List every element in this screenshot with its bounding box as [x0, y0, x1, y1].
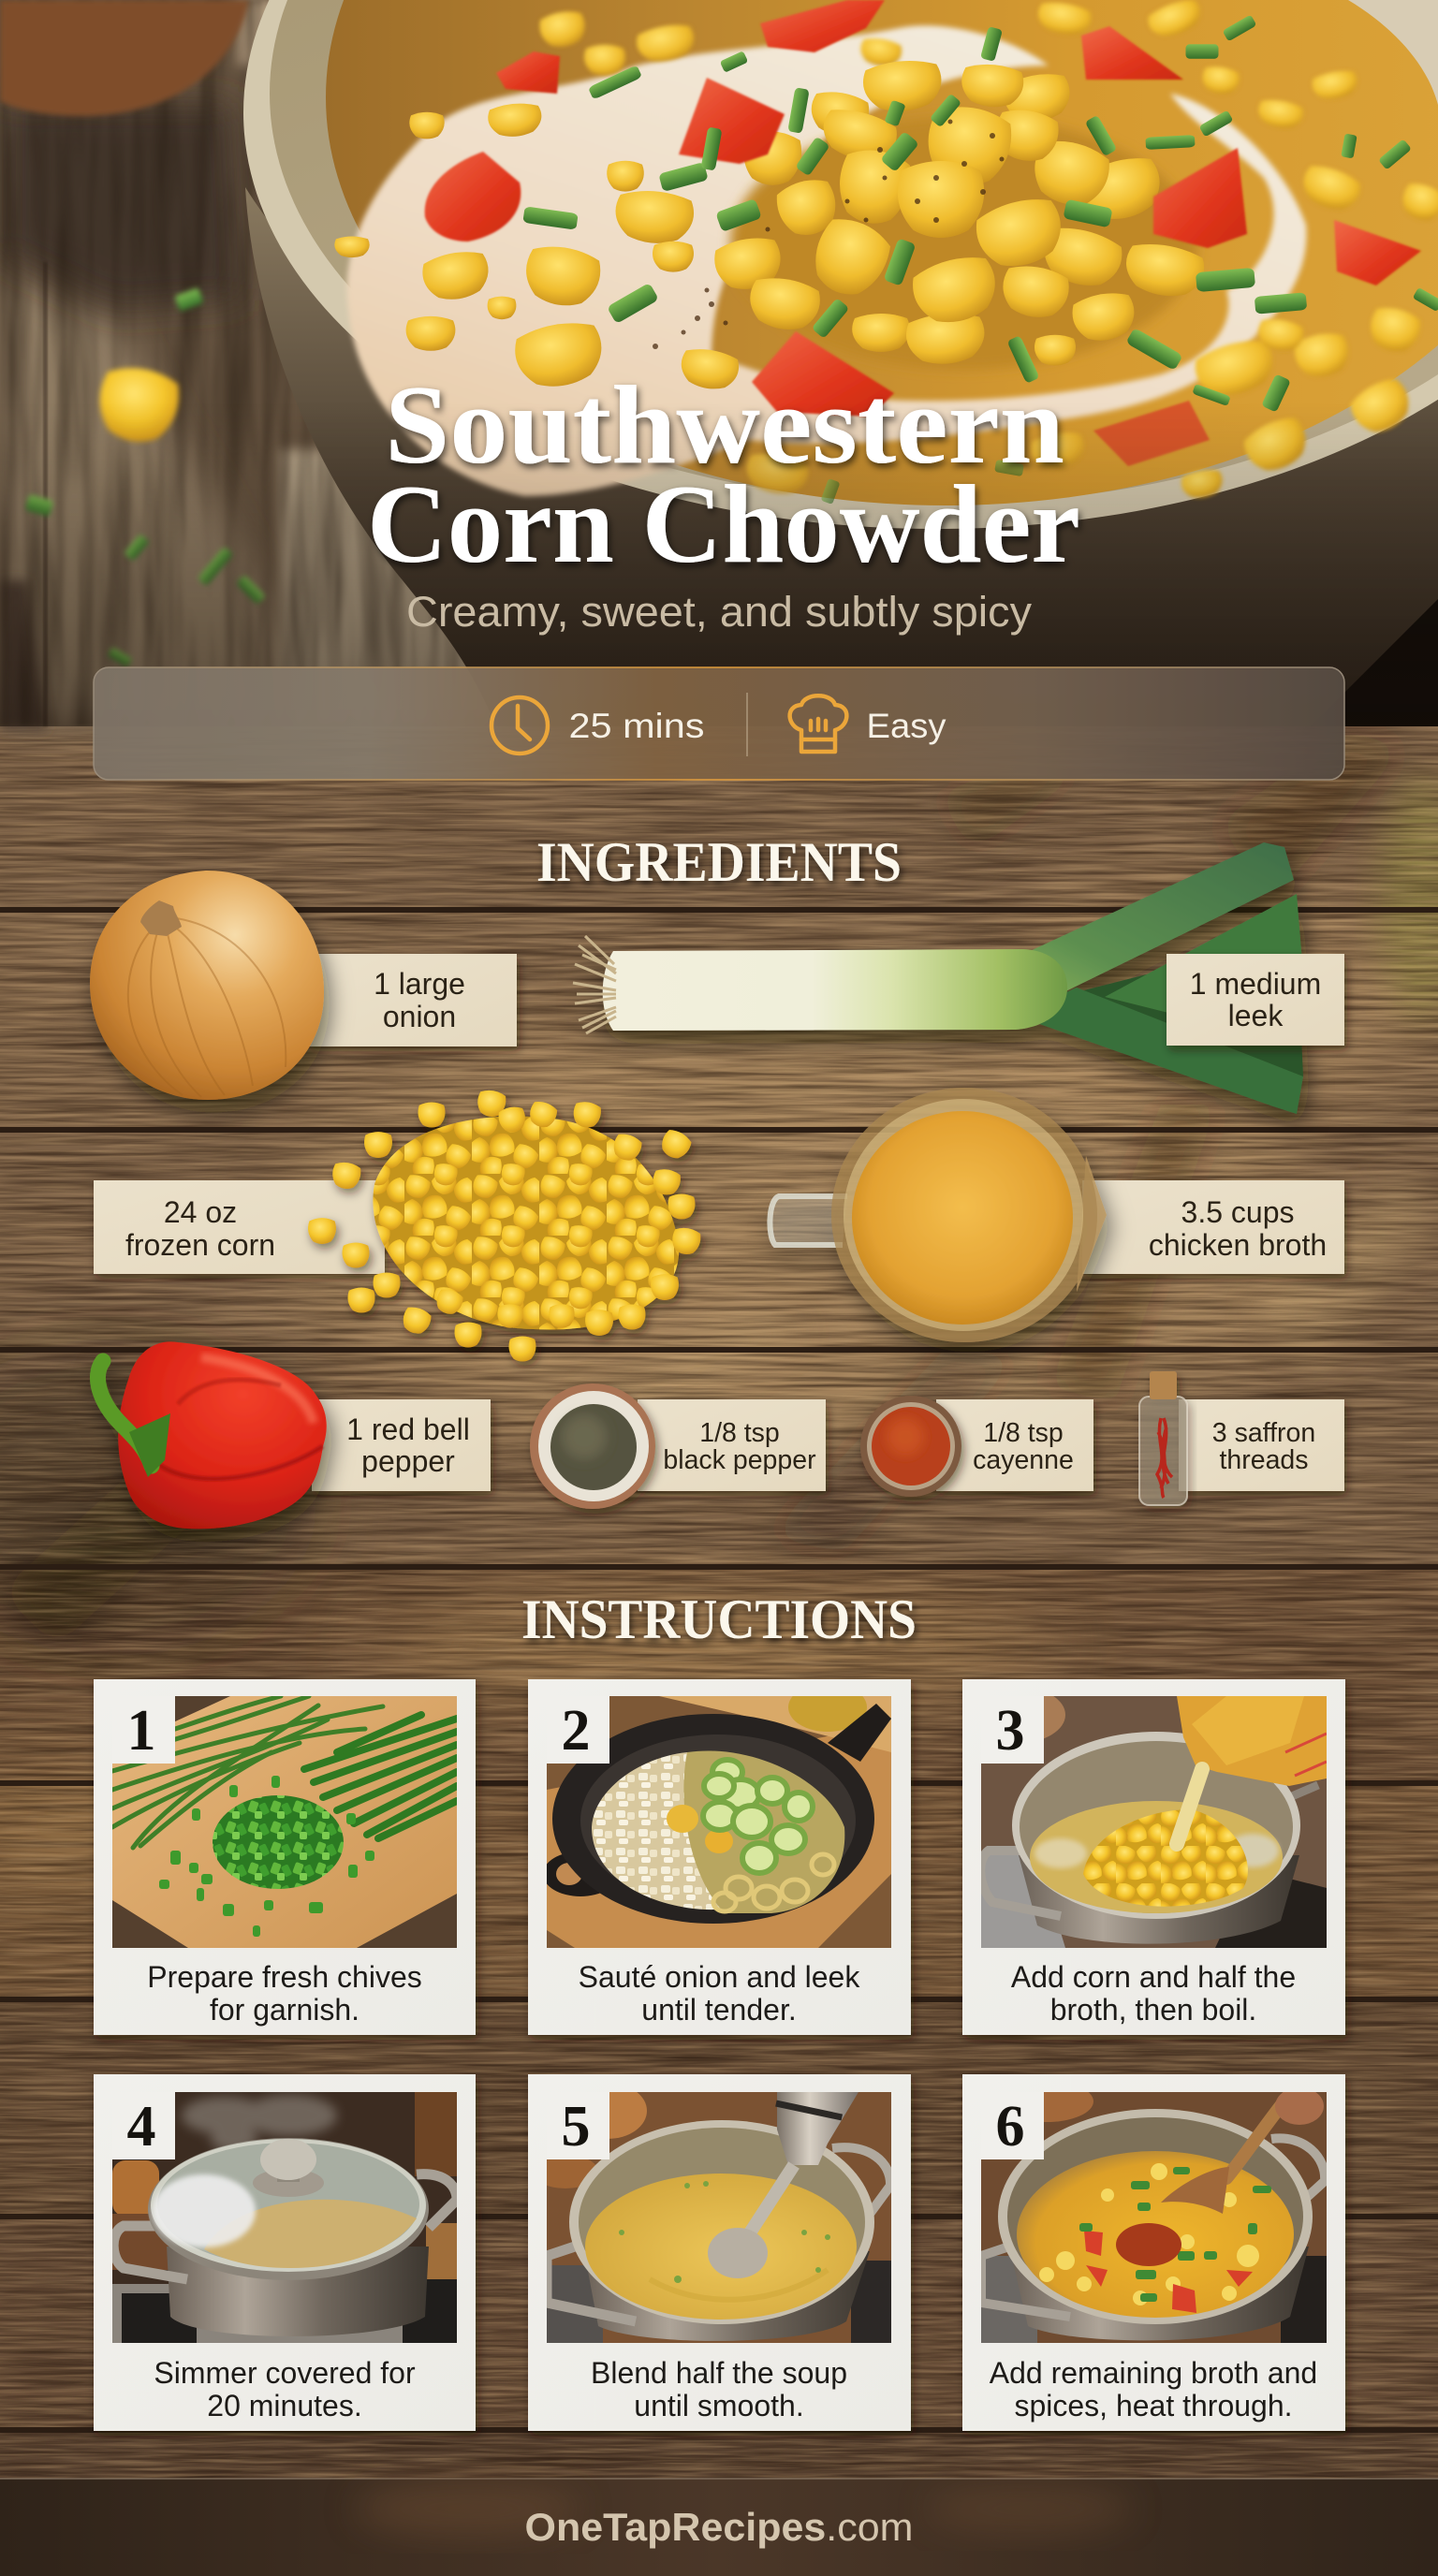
step card 2 [528, 1679, 911, 2035]
heading: instructions: INSTRUCTIONS [521, 1588, 917, 1650]
prep time: 25 mins [569, 707, 704, 745]
label: cayenne: cayenne [973, 1445, 1074, 1475]
pepper flecks on corn [653, 120, 1004, 349]
number badge 4: 4 [127, 2095, 155, 2159]
step 3 image: pouring broth on corn [981, 1696, 1327, 1948]
step card 5 [528, 2074, 911, 2431]
step 1 image: chives on cutting board [112, 1696, 457, 1948]
step 5 image: immersion blender in pot [547, 2092, 891, 2343]
step card 3 [962, 1679, 1345, 2035]
step 1 text: Prepare fresh chives [147, 1960, 422, 1994]
number badge 6 [981, 2092, 1044, 2159]
label: black pepper: 1/8 tsp [699, 1418, 780, 1448]
number badge 5: 5 [562, 2095, 590, 2159]
step card 1 [94, 1679, 476, 2035]
number badge 2: 2 [562, 1699, 590, 1763]
diced red peppers [425, 0, 1421, 466]
label: corn: frozen corn [125, 1228, 275, 1262]
footer [0, 2478, 1438, 2576]
wooden dish top left [0, 0, 249, 116]
panel: ingredients [90, 831, 1344, 1529]
step 2 text [579, 1960, 860, 2027]
step 6 text: Add remaining broth and [990, 2356, 1317, 2390]
icon: leek [573, 842, 1303, 1114]
number badge 1 [112, 1696, 175, 1764]
step 4 text: 20 minutes. [207, 2389, 362, 2422]
step card 6 [962, 2074, 1345, 2431]
step 4 text: Simmer covered for [154, 2356, 416, 2390]
hero: bowl of chowder on wood [0, 0, 1438, 730]
label: leek [1167, 954, 1344, 1046]
number badge 6: 6 [996, 2095, 1024, 2159]
chive pieces [522, 15, 1438, 505]
step 5 text: Blend half the soup [591, 2356, 847, 2390]
step 3 text: Add corn and half the [1011, 1960, 1296, 1994]
label: saffron: threads [1219, 1445, 1309, 1475]
label: onion: onion [383, 1000, 456, 1033]
subtitle: Creamy, sweet, and subtly spicy [406, 588, 1033, 636]
icon: chef hat [790, 695, 846, 752]
step 1 text [147, 1960, 422, 2027]
footer brand text: OneTapRecipes.com [524, 2505, 914, 2549]
step 1 text: for garnish. [210, 1993, 360, 2027]
icon: clock [492, 697, 548, 754]
label: saffron: 3 saffron [1212, 1418, 1315, 1448]
step 6 text [990, 2356, 1317, 2422]
label: broth: chicken broth [1149, 1228, 1327, 1262]
step 3 text: broth, then boil. [1050, 1993, 1256, 2027]
step 5 text: until smooth. [634, 2389, 804, 2422]
icon: bowl of cayenne [860, 1396, 961, 1497]
step 2 image: skillet with onion and leek [547, 1696, 891, 1948]
label: corn: 24 oz [164, 1195, 237, 1229]
icon: corn pile [308, 1089, 702, 1362]
label: onion: 1 large [374, 967, 465, 1001]
label: red bell pepper: pepper [361, 1444, 455, 1478]
soup corn kernels [334, 0, 1438, 501]
label: broth [1082, 1180, 1344, 1274]
cream swirls [346, 25, 1306, 496]
panel: instructions [94, 1588, 1345, 2431]
icon: onion [90, 871, 324, 1100]
step 2 text: until tender. [641, 1993, 797, 2027]
number badge 2 [547, 1696, 609, 1764]
label: onion [307, 954, 517, 1046]
icon: red bell pepper [97, 1341, 327, 1529]
number badge 4 [112, 2092, 175, 2159]
icon: saffron vial [1139, 1371, 1187, 1505]
title: Southwestern [385, 362, 1064, 487]
label: corn [94, 1180, 385, 1274]
label: black pepper [638, 1399, 826, 1491]
difficulty: Easy [867, 707, 946, 745]
icon: bowl of black pepper [530, 1383, 655, 1509]
step card 4 [94, 2074, 476, 2431]
label: cayenne: 1/8 tsp [983, 1418, 1064, 1448]
label: cayenne [936, 1399, 1093, 1491]
golden broth under the corn mound [730, 117, 1198, 370]
step 2 text: Sauté onion and leek [579, 1960, 860, 1994]
number badge 3: 3 [996, 1699, 1024, 1763]
label: leek: leek [1228, 999, 1284, 1032]
title: Corn Chowder [367, 461, 1080, 586]
label: leek: 1 medium [1190, 967, 1321, 1001]
step 3 text [1011, 1960, 1296, 2027]
number badge 5 [547, 2092, 609, 2159]
bowl [243, 0, 1438, 726]
label: red bell pepper [312, 1399, 491, 1491]
icon: measuring jug of broth [770, 1088, 1107, 1342]
stats bar [94, 667, 1344, 780]
number badge 1: 1 [127, 1699, 155, 1763]
label: broth: 3.5 cups [1181, 1195, 1294, 1229]
step 6 text: spices, heat through. [1014, 2389, 1293, 2422]
wood table background [0, 724, 1438, 2479]
step 4 image: covered simmering pot [112, 2092, 457, 2343]
step 4 text [154, 2356, 416, 2422]
label: black pepper: black pepper [663, 1445, 816, 1475]
step 6 image: finished soup with spoon [981, 2092, 1327, 2343]
scattered corn and chives on the table [24, 287, 266, 667]
title [367, 362, 1080, 586]
label: saffron [1179, 1399, 1344, 1491]
label: red bell pepper: 1 red bell [346, 1412, 470, 1446]
step 5 text [591, 2356, 847, 2422]
heading: ingredients: INGREDIENTS [536, 831, 902, 893]
number badge 3 [981, 1696, 1044, 1764]
